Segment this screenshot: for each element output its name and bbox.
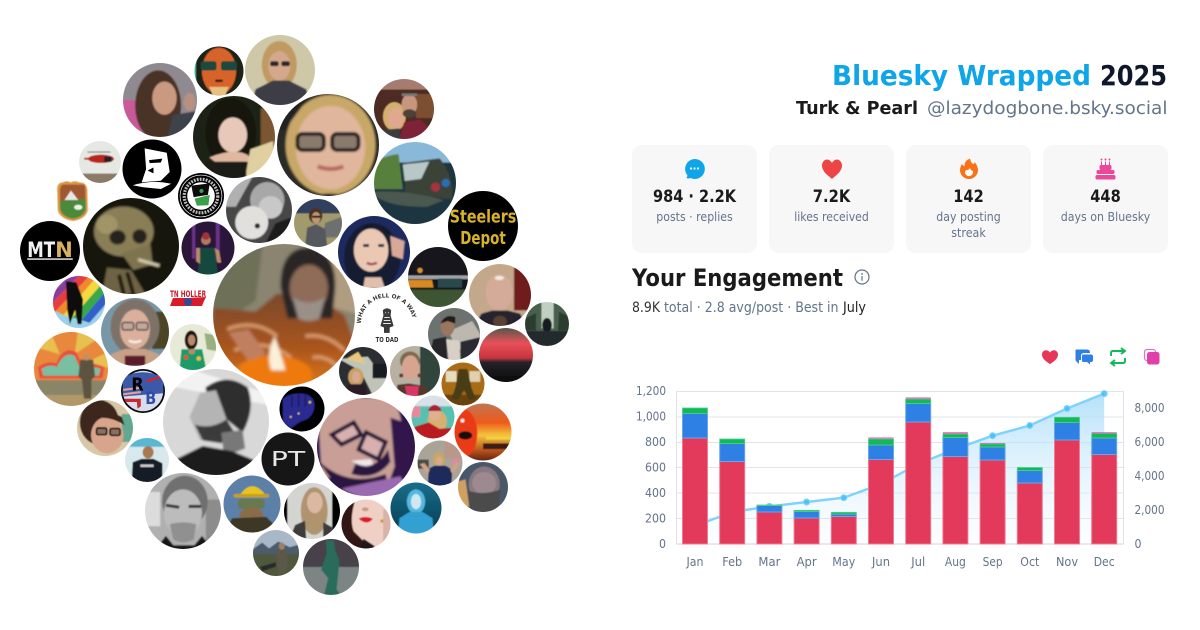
engagement summary: July bbox=[842, 300, 866, 316]
month labels: May bbox=[832, 555, 855, 569]
stat card: days on Bluesky: 448 bbox=[1090, 187, 1121, 207]
avatar: red aurora bbox=[479, 328, 533, 382]
avatar: red cap cheerleader bbox=[412, 396, 454, 438]
avatar: bearded man profile, monochrome bbox=[158, 364, 274, 480]
stat card: day posting streak: streak bbox=[951, 225, 986, 240]
avatar: man with dark hair on couch bbox=[428, 308, 480, 360]
avatar: what a hell of a way to dad logo bbox=[356, 293, 416, 344]
stat card: day posting streak: 142 bbox=[953, 187, 984, 207]
avatar: blonde woman in glasses bbox=[245, 35, 315, 105]
icon: info bbox=[855, 270, 869, 284]
month labels: Dec bbox=[1094, 555, 1115, 569]
avatar: antifascist green flag logo bbox=[178, 173, 224, 219]
grid lines and axes bbox=[676, 392, 1124, 544]
engagement summary: 8.9K bbox=[632, 300, 661, 316]
avatar: blue hooded figure bbox=[390, 482, 442, 534]
avatar: woman with short hair and earrings bbox=[390, 346, 440, 396]
avatar: MTN logo: N bbox=[55, 238, 73, 262]
avatar: woman with long brown hair bbox=[123, 63, 197, 137]
avatar: MTN logo: MT bbox=[27, 238, 56, 262]
month labels: Apr bbox=[797, 555, 817, 569]
engagement chart bbox=[636, 384, 1164, 569]
avatar: raised hand patch bbox=[57, 181, 88, 221]
icon: flame bbox=[960, 158, 978, 179]
avatar: night scene bbox=[408, 247, 468, 307]
stat card: day posting streak: day posting bbox=[936, 209, 1001, 224]
stat card: likes received: likes received bbox=[794, 209, 869, 224]
avatar: bald man bbox=[469, 264, 531, 326]
avatar: RB logo: R bbox=[131, 375, 144, 396]
chart legend icons bbox=[1042, 348, 1160, 366]
profile name and handle: Turk & Pearl bbox=[796, 98, 918, 119]
avatar: what a hell of a way to dad logo: WHAT A HELL OF A WAY bbox=[356, 293, 416, 323]
month labels: Mar bbox=[758, 555, 780, 569]
month labels: Jul bbox=[910, 555, 925, 569]
avatar: pride flag silhouette bbox=[53, 276, 105, 328]
right axis labels: 6,000 bbox=[1134, 435, 1164, 449]
avatar: older man, monochrome bbox=[141, 469, 225, 553]
left axis labels: 1,000 bbox=[636, 410, 666, 424]
title: Bluesky Wrapped bbox=[832, 59, 1091, 92]
left axis labels: 1,200 bbox=[636, 384, 666, 398]
right axis labels: 2,000 bbox=[1134, 503, 1164, 517]
avatar: smiling couple bbox=[374, 79, 434, 139]
stat card: day posting streak bbox=[906, 145, 1031, 253]
stat card: posts and replies bbox=[632, 145, 757, 253]
avatar: blonde woman in black glasses bbox=[277, 94, 379, 196]
avatar: RB logo bbox=[119, 367, 167, 415]
profile name and handle: @lazydogbone.bsky.social bbox=[927, 98, 1168, 119]
avatar: laughing bearded man in glasses, purple tint bbox=[317, 398, 415, 496]
stat card: days on Bluesky bbox=[1043, 145, 1168, 253]
icon: birthday cake bbox=[1096, 158, 1116, 180]
avatar: MTN logo bbox=[20, 221, 80, 281]
avatar: TN Holler logo: TN HOLLER bbox=[170, 290, 206, 300]
avatar: blonde woman at fair lights bbox=[339, 347, 387, 395]
stat card: posts and replies: posts · replies bbox=[656, 209, 733, 224]
avatar: black ship logo bbox=[122, 140, 182, 198]
avatar: long-haired blonde woman bbox=[284, 483, 340, 539]
right axis labels: 0 bbox=[1134, 537, 1142, 551]
right axis labels: 4,000 bbox=[1134, 469, 1164, 483]
avatar: Steelers Depot logo bbox=[448, 191, 518, 261]
avatar: woman in green dress on stage bbox=[182, 222, 234, 274]
avatar: man on mountain trail bbox=[251, 528, 301, 579]
left axis labels: 400 bbox=[645, 486, 666, 500]
avatar: woman with dark hair bbox=[338, 216, 410, 288]
avatar: gold figure bbox=[442, 362, 484, 406]
month labels: Jan bbox=[686, 555, 704, 569]
month labels: Nov bbox=[1056, 555, 1078, 569]
stacked bars: likes bbox=[682, 422, 1117, 544]
month labels: Aug bbox=[945, 555, 966, 569]
avatar: cap on car dashboard bbox=[374, 142, 456, 224]
avatar: Soos graffiti mural bbox=[34, 332, 108, 406]
left axis labels: 800 bbox=[645, 435, 666, 449]
avatar: PT logo bbox=[259, 430, 317, 488]
month labels: Oct bbox=[1020, 555, 1040, 569]
right axis labels bbox=[1134, 401, 1164, 551]
avatar: helicopter bbox=[79, 141, 121, 183]
right axis labels: 8,000 bbox=[1134, 401, 1164, 415]
left axis labels: 600 bbox=[645, 460, 666, 474]
avatar: man in black sweatshirt in snow bbox=[123, 436, 171, 484]
month labels bbox=[686, 555, 1115, 569]
cumulative area and line bbox=[695, 391, 1107, 544]
month labels: Sep bbox=[983, 555, 1003, 569]
avatar: waterfall meditation bbox=[525, 302, 569, 346]
avatar: hooded man by fire, largest bubble bbox=[213, 244, 355, 386]
avatar: man with sunglasses bbox=[194, 46, 244, 96]
avatar: blonde woman in navy top bbox=[418, 440, 462, 486]
avatar: TN Holler logo bbox=[170, 290, 206, 306]
left axis labels: 0 bbox=[659, 537, 666, 551]
avatar: skull with cigarette painting bbox=[83, 198, 179, 294]
left axis labels bbox=[636, 384, 666, 551]
icon: reposts bbox=[1111, 348, 1125, 366]
avatar: woman in sunglasses outdoors bbox=[294, 199, 342, 247]
avatar: red lips close-up bbox=[342, 500, 390, 548]
stacked bars: replies bbox=[682, 404, 1117, 518]
engagement summary: total · 2.8 avg/post · Best in bbox=[664, 300, 838, 316]
left axis labels: 200 bbox=[645, 512, 666, 526]
stacked bars: quotes bbox=[868, 397, 1117, 444]
avatar: woman hugging dog, monochrome bbox=[226, 177, 292, 243]
avatar: smiling woman with curly grey hair bbox=[101, 298, 169, 366]
avatar: woman in glasses with brown hair bbox=[74, 397, 136, 459]
stat card: days on Bluesky: days on Bluesky bbox=[1061, 209, 1151, 224]
avatar: green statue by the sea bbox=[303, 539, 359, 595]
heading: your engagement: Your Engagement bbox=[631, 264, 843, 292]
title: 2025 bbox=[1100, 59, 1167, 92]
avatar: RB logo: B bbox=[145, 389, 156, 409]
avatar: woman in floral dress bbox=[168, 322, 218, 372]
avatar: young woman portrait bbox=[193, 96, 275, 178]
avatar: firefighter with yellow helmet bbox=[221, 473, 283, 535]
avatar: Steelers Depot logo: Depot bbox=[460, 229, 506, 249]
month labels: Feb bbox=[722, 555, 742, 569]
icon: replies bbox=[1076, 350, 1093, 364]
avatar bubble cluster bbox=[20, 35, 569, 595]
icon: quotes bbox=[1144, 350, 1160, 364]
avatar: bearded man close-up bbox=[458, 462, 508, 512]
icon: heart bbox=[822, 160, 842, 179]
avatar: Steelers Depot logo: Steelers bbox=[450, 207, 516, 227]
avatar: blue fist with stars bbox=[280, 386, 324, 432]
stacked bars: reposts bbox=[682, 399, 1117, 514]
avatar: Elmo explosion bbox=[454, 404, 512, 460]
stat card: likes received bbox=[769, 145, 894, 253]
month labels: Jun bbox=[871, 555, 890, 569]
profile name and handle bbox=[796, 98, 1168, 119]
avatar: what a hell of a way to dad logo: TO DAD bbox=[376, 336, 399, 344]
icon: chat bubble bbox=[685, 159, 705, 179]
stat card: likes received: 7.2K bbox=[813, 187, 851, 207]
icon: likes bbox=[1042, 350, 1058, 364]
stat card: posts and replies: 984 · 2.2K bbox=[653, 187, 737, 207]
avatar: PT logo: PT bbox=[271, 447, 306, 471]
